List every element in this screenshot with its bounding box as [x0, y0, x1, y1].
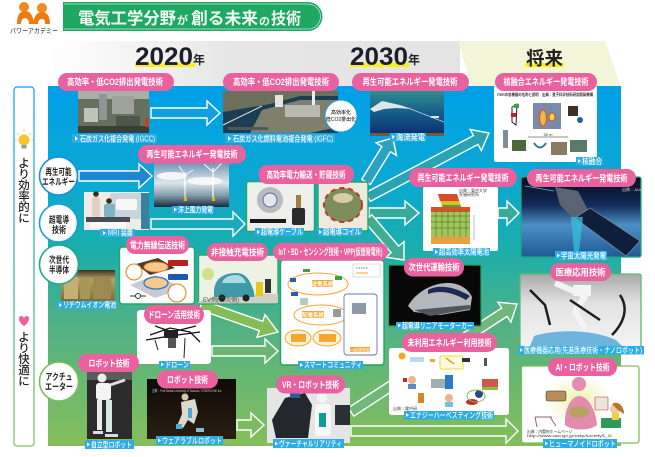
pill: renewable energy (ocean): 再生可能エネルギー発電技術: [362, 76, 458, 87]
title banner: 電気工学分野: [78, 8, 176, 28]
future heading: 将来: [526, 48, 564, 69]
pill: VR and robot technology: [276, 376, 345, 394]
arrow: coil to ocean current: [362, 138, 396, 185]
tag: [159, 361, 190, 368]
arrow: IGCC to IGFC: [151, 101, 220, 125]
pill: next-gen transport: 次世代運輸技術: [408, 262, 460, 272]
circle: next-gen semiconductors: [40, 245, 78, 284]
circle: actuators: エーター: [45, 381, 73, 392]
panel: smart community diagram: VPP(仮想発電所): [345, 346, 376, 352]
title banner: [63, 2, 322, 31]
pill: robot technology (wearable): ロボット技術: [167, 374, 208, 385]
arrow: renewable to offshore wind: [79, 164, 152, 188]
tag: [555, 251, 607, 260]
panel: wireless power diagram: [120, 247, 194, 304]
pill: renewable energy (ocean): [352, 73, 469, 91]
panel: superconducting coil: [317, 182, 368, 236]
pill: medical applications: [550, 263, 611, 281]
main gradient panel: [48, 86, 621, 446]
tag: [225, 134, 335, 143]
pill: contactless charging: [207, 243, 268, 261]
circle: next-gen semiconductors: 半導体: [49, 264, 69, 275]
panel: drone: ドローン: [165, 360, 189, 370]
year 2030: 2030: [350, 43, 408, 71]
tag: [298, 361, 363, 369]
icon: light bulb: [15, 130, 33, 148]
pill: AI and robot technology: [548, 358, 617, 376]
panel: energy harvesting: 出典：電中研: [393, 405, 417, 411]
pill: medical applications: 医療応用技術: [556, 266, 606, 278]
tag: [576, 157, 603, 166]
logo: Power Academy: [10, 2, 58, 35]
panel: smart community diagram: スマートコミュニティ: [304, 360, 362, 370]
pill: renewable energy (wind): [138, 145, 246, 164]
pill: renewable energy (space): 再生可能エネルギー発電技術: [536, 172, 628, 184]
circle: renewable energy: 再生可能: [46, 166, 72, 177]
arrow: coil to solar cell: [369, 201, 419, 225]
panel: ITER fusion diagram: 30 m: [544, 132, 553, 137]
panel: energy harvesting: [389, 348, 509, 420]
panel: autonomous robot photo: [85, 372, 134, 450]
tag: [317, 228, 362, 236]
panel: space solar photo: [521, 177, 644, 260]
pill: VR and robot technology: VR・ロボット技術: [282, 379, 339, 390]
panel: ITER fusion diagram: ITERの各機器の名称と説明 出典：量子科学技術研究開発機構: [497, 91, 593, 97]
panel: medical robot photo: [518, 274, 644, 355]
panel: lithium-ion battery photo: [57, 270, 117, 310]
panel: maglev photo: 超電導リニアモーターカー: [402, 320, 473, 330]
text: more efficient: よ: [18, 157, 30, 170]
tag: [396, 322, 474, 330]
arrow: VR to medical: [348, 302, 517, 416]
panel: ultra-high-efficiency solar cell: [423, 187, 498, 256]
pill: robot technology (autonomous): ロボット技術: [88, 358, 130, 368]
circle: renewable energy: [40, 157, 78, 195]
panel: IGCC photo: [72, 91, 157, 144]
arrow: MRI to cable: [151, 212, 245, 236]
panel: drone: [137, 310, 211, 370]
panel: smart community diagram: 配電系統: [302, 311, 324, 319]
pill: drone applications: [144, 305, 204, 324]
year 2030: 年: [408, 52, 420, 67]
panel: MRI photo: MRI 装置: [108, 228, 133, 238]
title banner: 創る未来: [191, 9, 259, 28]
tag: [172, 206, 214, 214]
icon: heart: [19, 316, 29, 326]
arrow: wearable robot to VR: [237, 413, 264, 437]
panel: energy harvesting: エナジーハーベスティング技術: [410, 410, 493, 420]
circle: renewable energy: エネルギー: [42, 177, 75, 187]
side strip: efficiency and comfort: [14, 87, 34, 446]
panel: superconducting cable: 超電導ケーブル: [261, 226, 303, 236]
panel: virtual reality photo: ヴァーチャルリアリティ: [279, 438, 342, 448]
pill: high efficiency low CO2 (2020): [58, 73, 174, 91]
tag: [255, 228, 304, 236]
pill: high efficiency transmission and storage: 高効率電力輸送・貯蔵技術: [266, 169, 346, 180]
text: more efficient: 効: [18, 179, 30, 192]
text: more comfortable: 快: [18, 352, 30, 366]
timeline band: [48, 41, 621, 87]
tag: [57, 301, 117, 309]
callout: high efficiency low CO2: 高効率化: [331, 109, 351, 116]
tag: [273, 439, 344, 448]
pill: fusion energy: 核融合エネルギー発電技術: [504, 76, 588, 87]
panel: AI humanoid illustration: 出典：内閣府ホームページ: [527, 429, 573, 434]
callout: high efficiency low CO2: [325, 100, 357, 132]
pill: renewable energy (wind): 再生可能エネルギー発電技術: [146, 148, 238, 160]
panel: lithium-ion battery photo: リチウムイオン電池: [63, 300, 116, 310]
panel: contactless charging EV: [198, 255, 278, 304]
panel: contactless charging EV: EV例(二次側): [203, 296, 239, 304]
text: more efficient: に: [18, 212, 30, 225]
text: more comfortable: 適: [18, 363, 30, 377]
tag: [156, 436, 223, 445]
panel: wearable robot photo: 出典： Prof.Sankai University of Tsukuba / CYBERDYNE Inc.: [152, 387, 222, 393]
panel: ITER fusion diagram: 核融合: [582, 156, 602, 166]
panel: autonomous robot photo: 自立型ロボット: [91, 440, 132, 450]
callout: high efficiency low CO2: 低CO2排出化: [326, 116, 356, 123]
panel: AI humanoid illustration: [522, 366, 639, 448]
panel: IGFC photo: 石炭ガス化燃料電池複合発電 (IGFC): [233, 134, 333, 144]
tag: [433, 248, 490, 256]
title banner: 技術: [271, 9, 301, 28]
panel: superconducting coil: 超電導コイル: [323, 226, 361, 236]
tag: [72, 134, 157, 143]
panel: smart community diagram: 送電系統: [311, 280, 334, 288]
circle: superconductivity: 技術: [52, 224, 66, 235]
pill: wireless power: [126, 236, 189, 254]
title banner: の: [259, 16, 270, 28]
text: more efficient: 率: [18, 190, 30, 203]
arrow: contactless charging to smart community: [199, 300, 278, 337]
title banner: が: [177, 13, 188, 27]
pill: contactless charging: 非接触充電技術: [211, 246, 264, 258]
arrow: solar cell to space solar: [498, 201, 519, 225]
panel: maglev photo: [388, 265, 481, 330]
panel: ultra-high-efficiency solar cell: 出典：東京大学: [459, 187, 487, 193]
tag: [404, 411, 494, 420]
panel: space solar photo: 出典：JAXA: [622, 186, 644, 192]
pill: drone applications: ドローン活用技術: [148, 309, 200, 320]
panel: AI humanoid illustration: http://www.cao.go.jp/cstp/society5_0/: [527, 434, 612, 438]
pill: next-gen transport: [404, 258, 464, 276]
year 2020: 2020: [135, 43, 193, 71]
panel: wearable robot photo: [147, 379, 236, 445]
pill: high efficiency transmission and storage: [258, 165, 354, 184]
pill: renewable energy (space): [527, 169, 636, 187]
panel: ITER fusion diagram: [494, 86, 603, 166]
pill: wireless power: 電力無線伝送技術: [130, 240, 185, 250]
circle: actuators: [40, 362, 78, 401]
panel: MRI photo: [84, 191, 149, 238]
pill: AI and robot technology: AI・ロボット技術: [556, 362, 610, 372]
panel: superconducting cable: [246, 182, 314, 236]
panel: offshore wind photo: [154, 163, 229, 214]
circle: superconductivity: [40, 204, 78, 242]
text: more efficient: り: [18, 168, 30, 181]
arrow: coil to fusion: [366, 129, 489, 201]
logo: Power Academy: パワーアカデミー: [10, 26, 58, 35]
panel: ocean current photo: 海流発電: [396, 132, 425, 142]
text: more comfortable: よ: [18, 331, 30, 344]
tag: [100, 229, 135, 237]
pill: high efficiency low CO2 (2020): 高効率・低CO2排出発電技術: [67, 76, 163, 87]
panel: AI humanoid illustration: ヒューマノイドロボット: [549, 440, 616, 448]
text: more comfortable: り: [18, 342, 30, 355]
panel: ultra-high-efficiency solar cell: 超高効率太陽電池: [439, 246, 489, 256]
circle: next-gen semiconductors: 次世代: [49, 254, 69, 265]
panel: smart community diagram: [280, 260, 384, 370]
panel: offshore wind photo: 洋上風力発電: [178, 204, 213, 214]
panel: virtual reality photo: [267, 388, 350, 448]
panel: IGFC photo: [223, 91, 338, 144]
arrow: coil to maglev: [364, 215, 404, 260]
tag: [390, 133, 426, 142]
tag: [85, 440, 134, 449]
arrow: VR to humanoid: [351, 419, 518, 443]
pill: renewable energy (solar cell): [409, 168, 517, 187]
pill: high efficiency low CO2 (IGFC): 高効率・低CO2排出発電技術: [233, 76, 329, 87]
pill: unused energy: [402, 333, 497, 352]
circle: actuators: アクチュ: [46, 372, 72, 382]
tag: [518, 346, 644, 354]
pill: high efficiency low CO2 (IGFC): [223, 73, 339, 91]
pill: robot technology (autonomous): [78, 354, 139, 372]
panel: IGCC photo: 石炭ガス化複合発電 (IGCC): [80, 134, 155, 144]
pill: robot technology (wearable): [157, 370, 218, 388]
text: more comfortable: に: [18, 375, 30, 388]
circle: superconductivity: 超電導: [49, 214, 69, 225]
panel: ocean current photo: [370, 91, 444, 142]
panel: space solar photo: 宇宙太陽光発電: [561, 250, 606, 260]
tag: [543, 439, 617, 448]
panel: ultra-high-efficiency solar cell: 先端研究所: [459, 191, 479, 197]
panel: wearable robot photo: ウェアラブルロボット: [162, 435, 222, 445]
text: more efficient: 的: [18, 200, 30, 214]
pill: fusion energy: [495, 73, 597, 91]
pill: IoT BD sensing VPP: IoT・BD・センシング技術・VPP(仮想発電所): [278, 246, 383, 257]
year 2020: 年: [193, 52, 205, 67]
arrow: drone to smart community: [212, 339, 278, 363]
pill: IoT BD sensing VPP: [273, 243, 388, 260]
pill: renewable energy (solar cell): 再生可能エネルギー発電技術: [418, 172, 508, 183]
arrows: [79, 101, 519, 443]
pill: unused energy: 未利用エネルギー利用技術: [408, 337, 492, 348]
